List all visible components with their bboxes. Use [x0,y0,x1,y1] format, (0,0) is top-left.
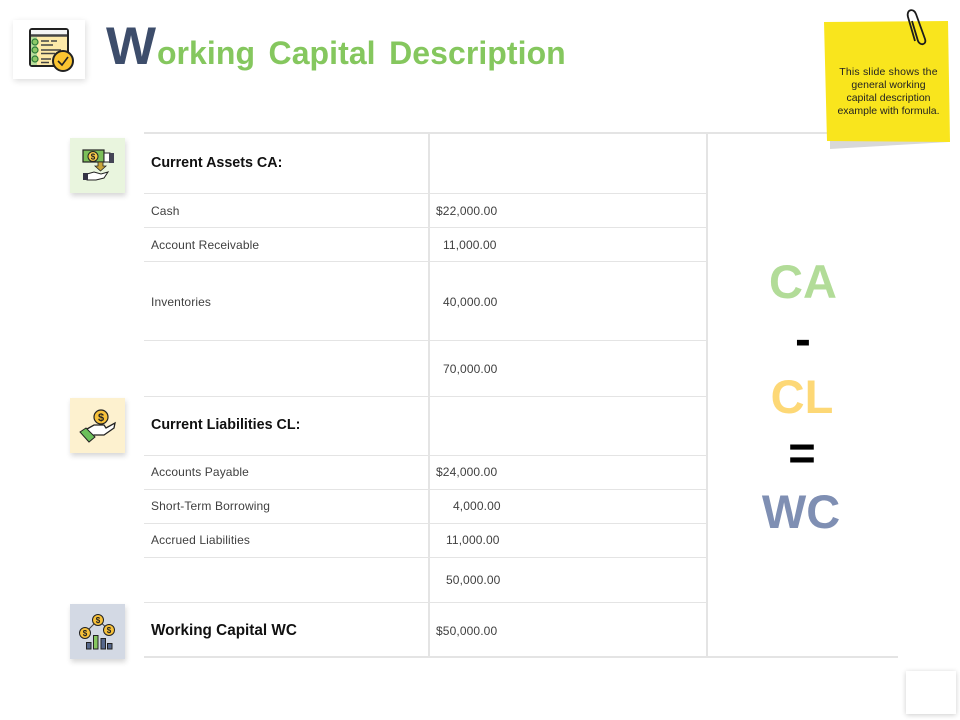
note text: capital description [846,92,931,104]
icon: coins and bars: $ [83,629,88,638]
icon: cash transfer [70,138,125,193]
icon: hand with coin [70,398,125,453]
icon: coins and bars: $ [96,616,101,625]
icon: paperclip [906,9,926,46]
formula: equals: = [788,426,816,479]
value: account receivable: 11,000.00 [443,238,497,252]
row: cash: Cash [151,204,180,218]
table [144,132,898,658]
row: account receivable: Account Receivable [151,238,259,252]
value: cash: $22,000.00 [436,204,497,218]
row heading: current assets: Current Assets CA: [151,155,282,171]
row heading: current liabilities: Current Liabilities CL: [151,417,300,433]
row: short-term borrowing: Short-Term Borrowing [151,499,270,513]
formula: WC: WC [762,485,840,538]
value: accrued liabilities: 11,000.00 [446,533,500,547]
sticky note [824,9,950,149]
icon: cash transfer: $ [91,152,96,162]
note text: general working [851,79,926,91]
value: current assets total: 70,000.00 [443,362,497,376]
value: current liabilities total: 50,000.00 [446,573,500,587]
row heading: working capital: Working Capital WC [151,622,297,639]
value: accounts payable: $24,000.00 [436,465,497,479]
note text: This slide shows the [839,66,938,78]
value: working capital: $50,000.00 [436,624,497,638]
formula [762,255,840,538]
row: accrued liabilities: Accrued Liabilities [151,533,250,547]
icon: coins and bars: $ [107,626,112,635]
note text: example with formula. [837,105,940,117]
value: short-term borrowing: 4,000.00 [453,499,501,513]
formula: minus: - [795,312,811,365]
icon: hand with coin: $ [98,412,104,424]
blank corner box [906,671,956,714]
formula: CA: CA [769,255,837,308]
icon: coins and bars [70,604,125,659]
title icon tile [13,20,85,79]
note text [837,66,940,117]
row: inventories: Inventories [151,295,211,309]
formula: CL: CL [771,370,833,423]
value: inventories: 40,000.00 [443,295,497,309]
title: Working Capital Description [106,17,566,76]
row: accounts payable: Accounts Payable [151,465,249,479]
